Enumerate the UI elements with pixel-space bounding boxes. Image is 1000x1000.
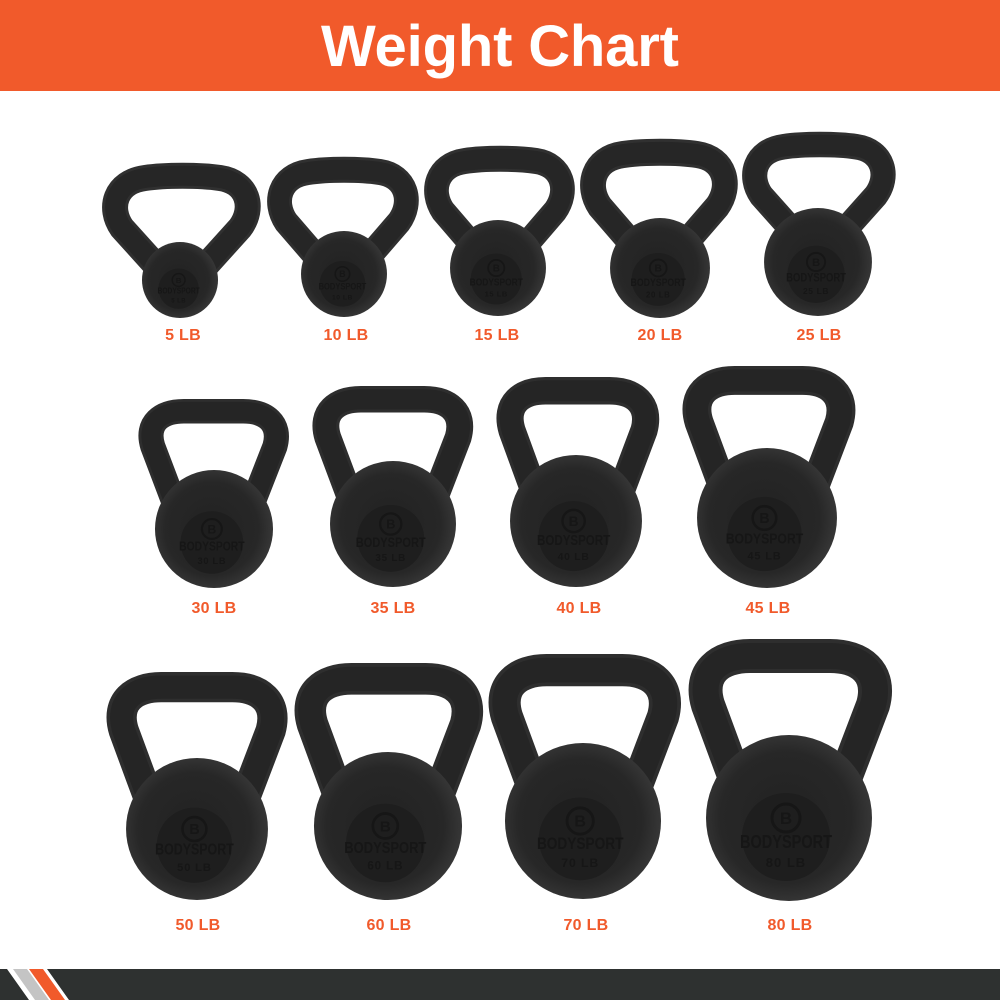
kettlebell: 5 LB: [115, 176, 248, 318]
kettlebell: 10 LB: BODYSPORT: [319, 282, 367, 292]
kettlebell: 80 LB: [706, 656, 875, 901]
kettlebell: 60 LB: BODYSPORT: [344, 839, 427, 857]
title banner: [0, 0, 1000, 91]
kettlebell: 5 LB: 5 LB: [171, 298, 186, 304]
kettlebell: 20 LB: B: [654, 264, 662, 275]
title: Weight Chart: [321, 14, 679, 79]
kettlebell: 10 LB: 10 LB: [332, 294, 353, 301]
label: 80 LB: 80 LB: [767, 917, 813, 934]
kettlebell: 40 LB: B: [569, 514, 579, 529]
kettlebell: 35 LB: 35 LB: [375, 553, 406, 564]
label: 15 LB: 15 LB: [474, 327, 520, 344]
kettlebell: 80 LB: B: [780, 809, 792, 828]
kettlebell: 35 LB: BODYSPORT: [356, 535, 426, 550]
kettlebell: 25 LB: B: [812, 257, 820, 269]
kettlebell: 15 LB: [436, 159, 562, 316]
label: 25 LB: 25 LB: [796, 327, 842, 344]
kettlebell: 40 LB: 40 LB: [558, 552, 590, 563]
kettlebell: 45 LB: B: [759, 511, 770, 527]
kettlebell: 40 LB: BODYSPORT: [537, 533, 610, 549]
label: 35 LB: 35 LB: [370, 600, 416, 617]
label: 10 LB: 10 LB: [323, 327, 369, 344]
label: 60 LB: 60 LB: [366, 917, 412, 934]
kettlebell: 30 LB: B: [207, 522, 216, 536]
kettlebell: 70 LB: 70 LB: [561, 856, 599, 870]
kettlebell: 15 LB: 15 LB: [485, 289, 508, 298]
kettlebell: 5 LB: B: [176, 276, 182, 285]
kettlebell: 20 LB: BODYSPORT: [631, 277, 686, 289]
kettlebell: 10 LB: [280, 170, 406, 317]
kettlebell: 60 LB: B: [380, 818, 391, 835]
kettlebell: 5 LB: BODYSPORT: [158, 287, 200, 296]
kettlebell: 30 LB: BODYSPORT: [179, 538, 245, 553]
footer bar with stripes: [0, 969, 1000, 1000]
kettlebell: 45 LB: BODYSPORT: [726, 530, 804, 547]
kettlebell: 70 LB: BODYSPORT: [537, 834, 624, 853]
kettlebell: 30 LB: [151, 411, 276, 588]
kettlebell: 10 LB: B: [339, 269, 346, 279]
kettlebell: 25 LB: 25 LB: [803, 286, 829, 296]
kettlebell: 45 LB: [697, 380, 841, 588]
label: 5 LB: 5 LB: [165, 327, 201, 344]
label: 45 LB: 45 LB: [745, 600, 791, 617]
label: 40 LB: 40 LB: [556, 600, 602, 617]
kettlebell: 25 LB: [755, 145, 883, 316]
kettlebell: 40 LB: [510, 391, 646, 587]
label: 30 LB: 30 LB: [191, 600, 237, 617]
kettlebell: 15 LB: BODYSPORT: [470, 277, 523, 288]
kettlebell: 30 LB: 30 LB: [198, 556, 226, 566]
label: 50 LB: 50 LB: [175, 917, 221, 934]
kettlebell: 20 LB: 20 LB: [646, 290, 670, 299]
label: 70 LB: 70 LB: [563, 917, 609, 934]
kettlebell: 35 LB: [326, 399, 460, 587]
kettlebell: 80 LB: 80 LB: [766, 855, 806, 870]
kettlebell: 20 LB: [593, 152, 725, 318]
kettlebell: 50 LB: BODYSPORT: [155, 842, 234, 859]
label: 20 LB: 20 LB: [637, 327, 683, 344]
kettlebell: 50 LB: [122, 687, 272, 900]
kettlebell: 60 LB: [310, 679, 467, 900]
kettlebell: 70 LB: B: [574, 814, 586, 831]
kettlebell: 15 LB: B: [493, 263, 500, 274]
kettlebell: 45 LB: 45 LB: [747, 550, 781, 562]
kettlebell: 25 LB: BODYSPORT: [786, 272, 847, 285]
kettlebell: 50 LB: 50 LB: [177, 862, 212, 874]
kettlebell: 60 LB: 60 LB: [367, 861, 403, 873]
kettlebell: 35 LB: B: [386, 517, 395, 532]
kettlebell: 70 LB: [505, 670, 665, 899]
kettlebell: 80 LB: BODYSPORT: [740, 832, 832, 852]
kettlebell: 50 LB: B: [189, 822, 200, 838]
